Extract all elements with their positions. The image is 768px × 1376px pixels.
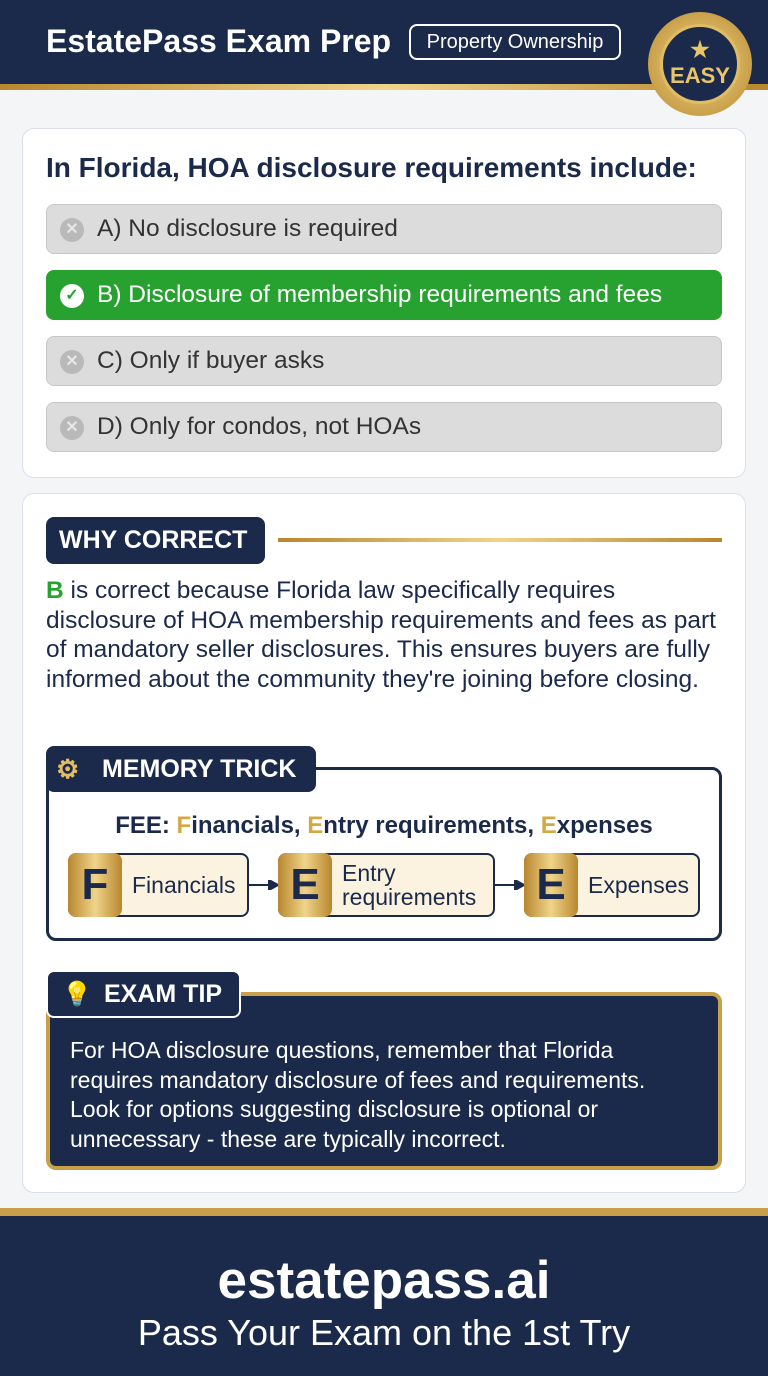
memory trick label: ⚙ xyxy=(56,754,79,784)
footer brand: estatepass.ai xyxy=(218,1251,550,1310)
option C: C) Only if buyer asks xyxy=(97,347,324,374)
panel: explanation xyxy=(22,493,746,1193)
option A: ✕ xyxy=(65,221,79,238)
mnemonic line: FEE: Financials, Entry requirements, Expenses xyxy=(115,812,653,839)
step E entry xyxy=(278,853,495,917)
exam tip label: EXAM TIP xyxy=(104,980,222,1008)
arrow xyxy=(495,880,524,890)
category tag xyxy=(409,24,621,60)
why correct label: WHY CORRECT xyxy=(59,526,247,554)
panel: exam tip xyxy=(46,992,722,1170)
option D: D) Only for condos, not HOAs xyxy=(97,413,421,440)
option B correct: B) Disclosure of membership requirements and fees xyxy=(97,281,662,308)
step E expenses: Expenses xyxy=(588,872,689,898)
option B correct: ✓ xyxy=(65,287,79,304)
header xyxy=(0,0,768,84)
option A xyxy=(46,204,722,254)
why correct label xyxy=(46,517,265,564)
badge: easy: ★ xyxy=(690,37,710,62)
panel: question xyxy=(22,128,746,478)
memory trick label: MEMORY TRICK xyxy=(102,754,296,782)
step E expenses: E xyxy=(536,860,566,909)
exam tip label xyxy=(46,970,241,1018)
category tag: Property Ownership xyxy=(427,31,603,53)
step F: F xyxy=(82,860,108,909)
option D: ✕ xyxy=(65,419,79,436)
step E entry: E xyxy=(290,860,320,909)
arrow xyxy=(249,880,278,890)
footer xyxy=(0,1208,768,1376)
explanation text: informed about the community they're joining before closing. xyxy=(46,666,699,692)
step E expenses xyxy=(524,853,700,917)
step E entry: Entry xyxy=(342,860,396,886)
badge: easy: EASY xyxy=(670,63,730,88)
title: EstatePass Exam Prep xyxy=(46,23,391,59)
badge: easy xyxy=(648,12,752,116)
explanation text: of mandatory seller disclosures. This ensures buyers are fully xyxy=(46,636,710,663)
option C: ✕ xyxy=(65,353,79,370)
exam tip label: 💡 xyxy=(62,980,92,1008)
tip text: For HOA disclosure questions, remember that Florida requires mandatory disclosure of fees and requirements. Look for options suggesting disclosure is optional or unnecessary - these are typically incorrect. xyxy=(70,1037,645,1152)
explanation text xyxy=(46,577,716,692)
panel: memory trick xyxy=(46,767,722,941)
option A: A) No disclosure is required xyxy=(97,215,398,242)
step F xyxy=(68,853,249,917)
step E entry: requirements xyxy=(342,884,476,910)
option B correct xyxy=(46,270,722,320)
option D xyxy=(46,402,722,452)
step F: Financials xyxy=(132,872,236,898)
memory trick label xyxy=(46,746,316,792)
option C xyxy=(46,336,722,386)
explanation text: disclosure of HOA membership requirements and fees as part xyxy=(46,606,716,634)
explanation text: B is correct because Florida law specifically requires xyxy=(46,577,615,604)
footer tagline: Pass Your Exam on the 1st Try xyxy=(138,1312,630,1353)
question heading: In Florida, HOA disclosure requirements include: xyxy=(46,152,697,183)
